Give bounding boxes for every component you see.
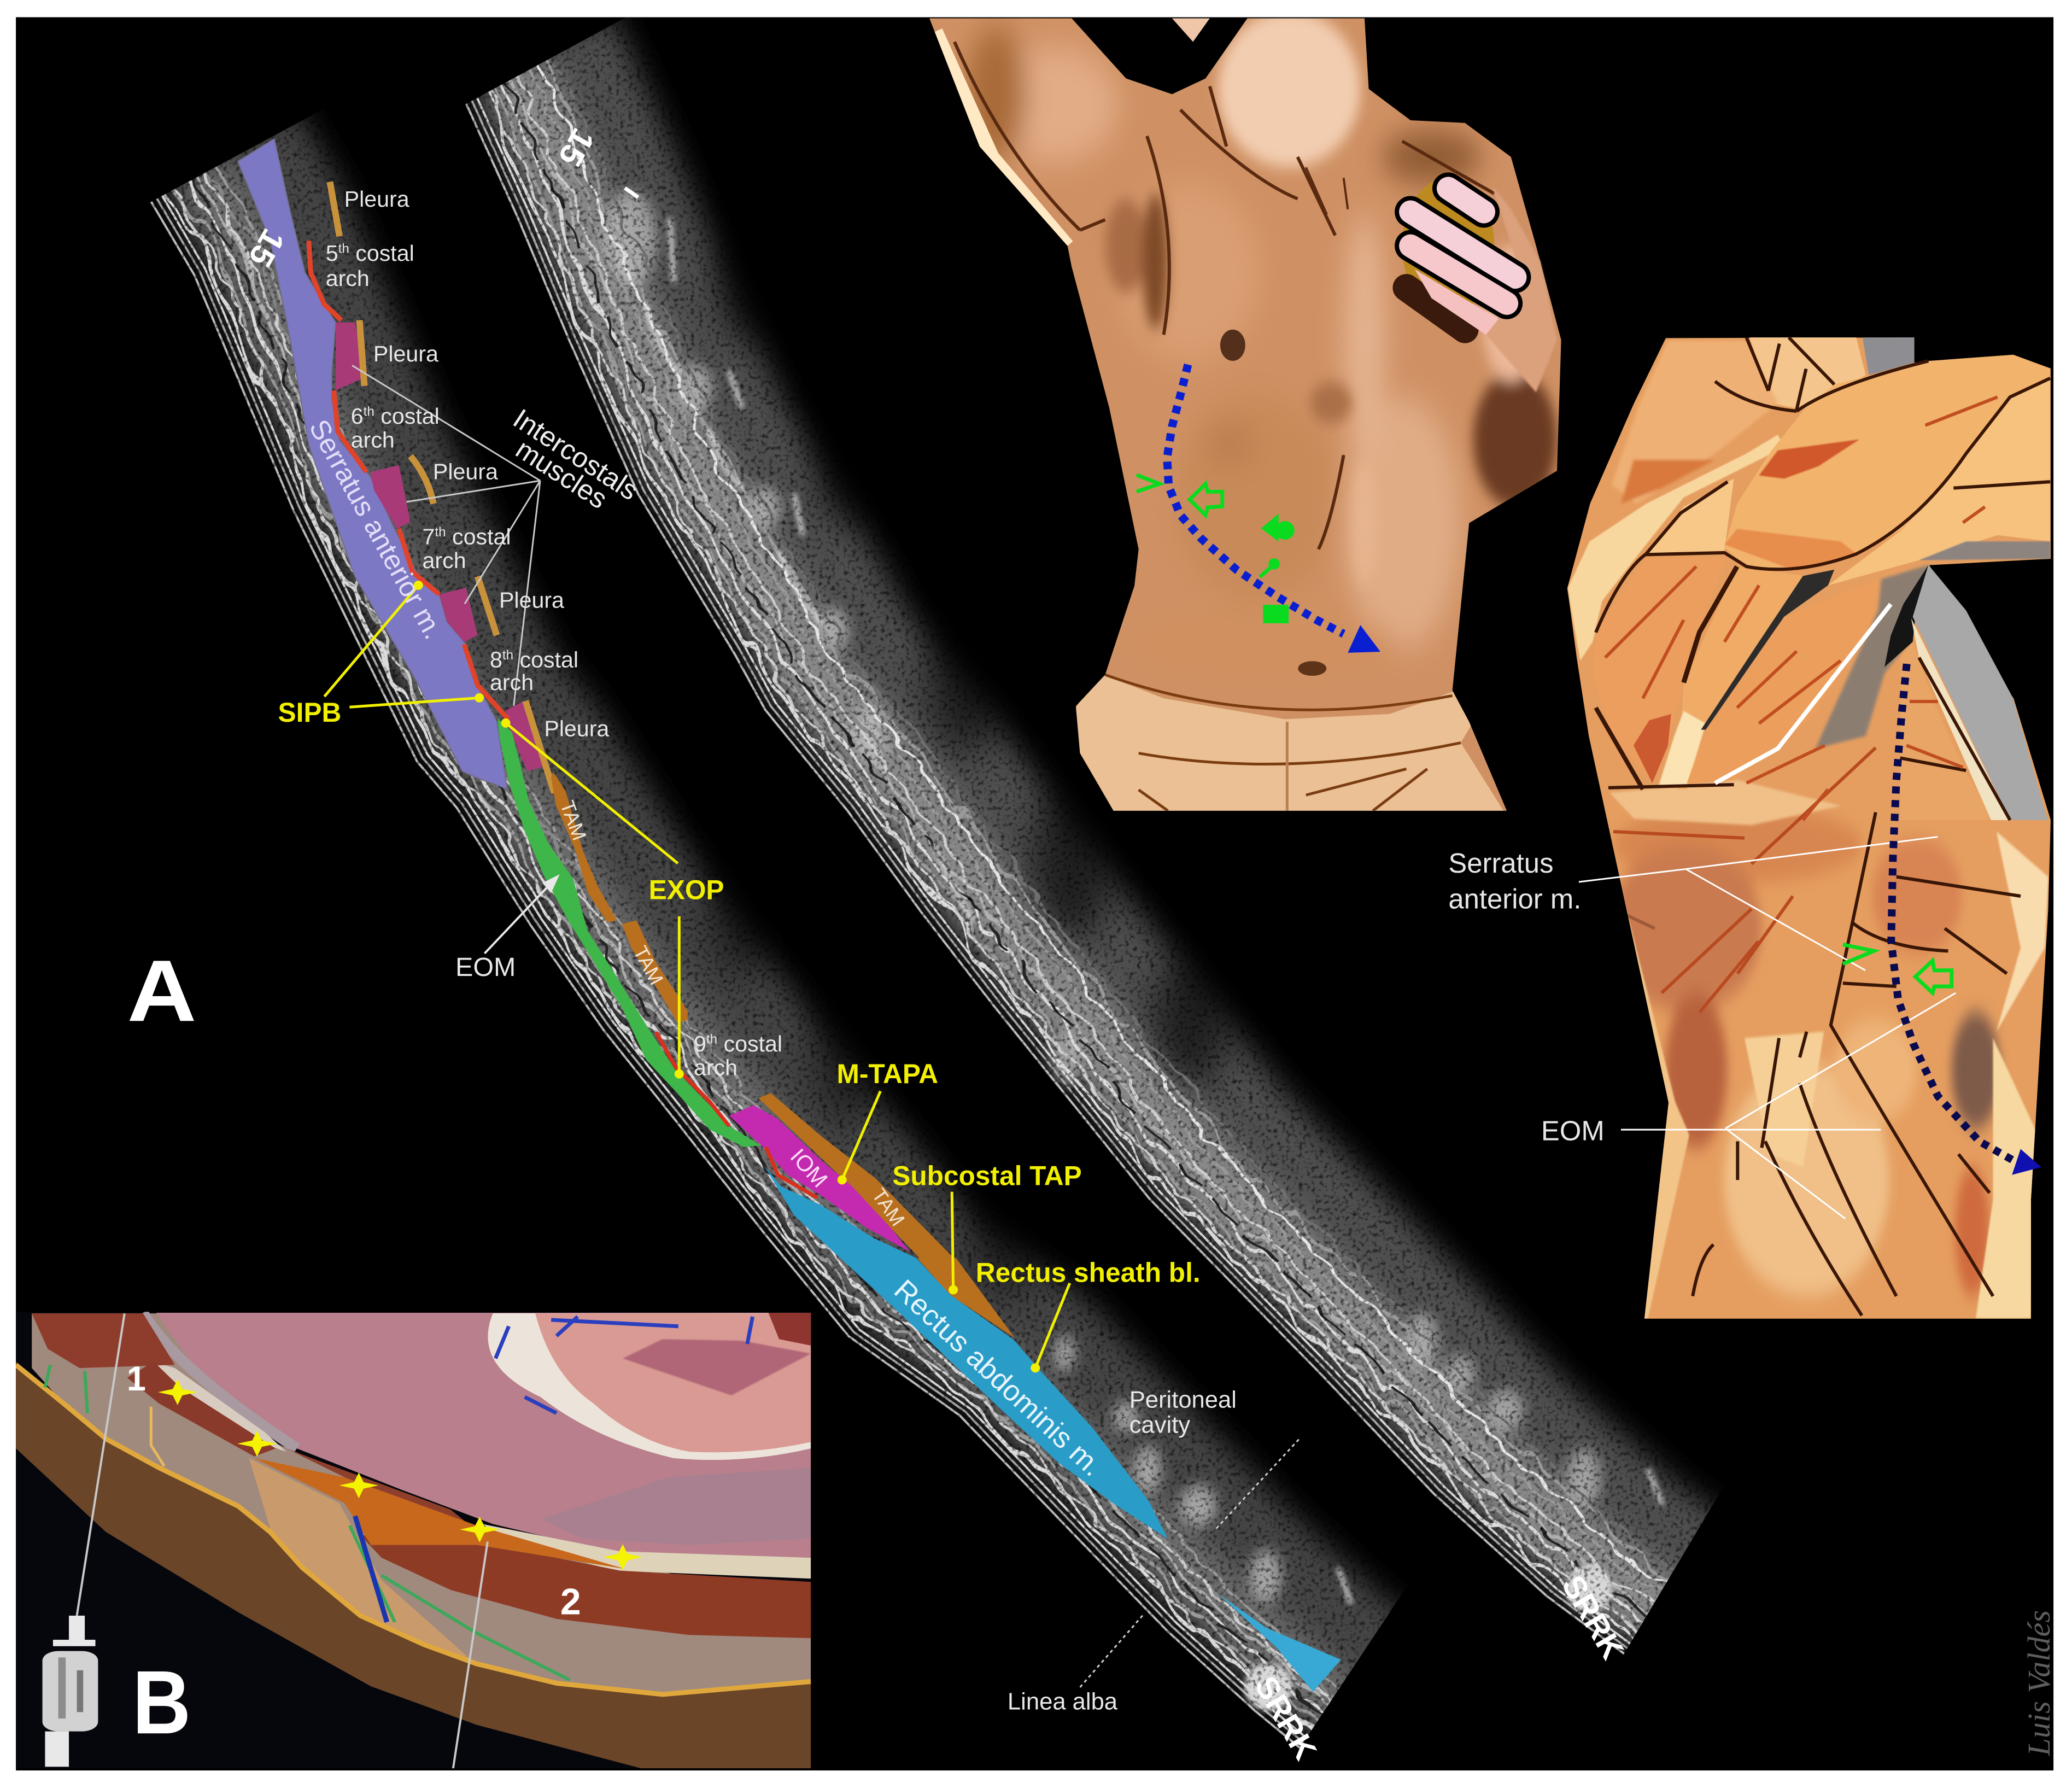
anatomical labels in white: costal <box>717 1031 782 1056</box>
panel B number 2: 2 <box>560 1581 581 1622</box>
intercostal muscle 1 <box>336 323 366 390</box>
ultrasound strip 2 (unlabelled scan) <box>450 0 1774 1669</box>
TAM label 1: TAM <box>556 798 591 843</box>
block names in yellow: EXOP <box>649 874 724 905</box>
anatomical labels in white <box>326 186 1237 1715</box>
subcutaneous tissue band <box>16 1361 811 1768</box>
muscle contours upper <box>1596 337 2050 820</box>
serratus anterior label, right panel: anterior m. <box>1448 883 1581 914</box>
IOM label: IOM <box>786 1144 833 1192</box>
anatomical labels in white: cavity <box>1129 1412 1190 1439</box>
coloured muscle overlays, upper scan <box>238 139 554 793</box>
reddish muscle fibres <box>1613 748 1876 1012</box>
probe logo strip 1: SRRK <box>1248 1670 1324 1766</box>
lens shading <box>1724 529 1856 571</box>
stomach lumen <box>623 1339 811 1395</box>
block names in yellow: SIPB <box>278 697 341 728</box>
anatomical labels in white: costal <box>513 647 578 673</box>
transversus abdominis muscle segment 1 <box>551 772 617 922</box>
anatomical labels in white: arch <box>351 428 395 453</box>
needle two <box>453 1542 488 1768</box>
anatomical labels in white: Linea alba <box>1008 1689 1118 1715</box>
stomach vessels <box>495 1317 753 1413</box>
dark muscle upper section <box>32 1313 175 1368</box>
navel <box>1298 661 1326 676</box>
TAM label 3: TAM <box>868 1184 909 1230</box>
transversus abdominis muscle segment 3 <box>758 1093 954 1258</box>
grey axilla <box>1816 565 1928 749</box>
serratus anterior label, right panel: Serratus <box>1448 847 1554 879</box>
serratus pointer lines <box>1579 837 1938 970</box>
depth marker strip 2: 15 <box>552 122 602 173</box>
green nerves <box>45 1365 570 1680</box>
anatomical labels in white: 7 <box>423 524 435 549</box>
lower muscle contours <box>1693 812 2021 1316</box>
anatomical labels in white: Pleura <box>373 341 438 366</box>
navy dotted scan path on muscle <box>1891 664 2014 1161</box>
anatomical labels in white: th <box>435 525 446 540</box>
left cream band <box>1567 435 1784 660</box>
artist signature: Luis Valdés <box>2021 1610 2057 1756</box>
blue vessel <box>355 1516 387 1622</box>
anatomical labels in white: costal <box>349 241 414 266</box>
external oblique muscle <box>497 718 761 1147</box>
skin shading <box>967 26 1482 675</box>
lower muscle shading <box>1610 806 2000 1296</box>
red pectoral blob <box>1634 714 1671 783</box>
anatomical labels in white: arch <box>490 670 534 695</box>
intercostals muscles rotated label: muscles <box>511 433 613 515</box>
pale strip <box>1911 618 2010 820</box>
tan oblique layer <box>249 1458 472 1661</box>
white tendon line <box>1715 604 1891 783</box>
rectus abdominis muscle <box>764 1165 1168 1539</box>
pale arm edge <box>936 31 1068 246</box>
big arm lens <box>1724 355 2050 571</box>
green probe markers <box>1137 475 1292 622</box>
serratus anterior muscle <box>238 139 507 789</box>
waistband and trousers <box>1074 672 1507 816</box>
coloured muscle overlays, middle scan <box>497 718 954 1258</box>
rib bands <box>1900 642 1998 820</box>
nipple <box>1220 330 1245 361</box>
injection target dots <box>414 581 1040 1372</box>
red fibres upper <box>1605 397 1998 820</box>
yellow fascia line <box>16 1365 811 1694</box>
stomach wall <box>488 1313 811 1460</box>
serratus anterior rotated label: Serratus anterior m. <box>303 414 449 644</box>
EOM arrow <box>484 876 558 954</box>
anatomical labels in white: 5 <box>326 241 338 266</box>
blue arrowhead <box>1348 625 1380 653</box>
pleura lines <box>330 182 554 793</box>
intercostal muscle 2 <box>370 465 411 529</box>
lower costal arch lines <box>656 1032 817 1197</box>
block names in yellow: Rectus sheath bl. <box>976 1257 1201 1288</box>
rectus abdominis far end <box>1218 1594 1341 1692</box>
needle one <box>77 1313 125 1616</box>
anatomical labels in white: th <box>338 242 349 256</box>
rib muscle band lower <box>360 1535 811 1638</box>
pale nerve branch <box>151 1407 165 1466</box>
intercostal pointer lines <box>352 365 540 706</box>
anatomical labels in white: Pleura <box>499 588 564 613</box>
panel label A: A <box>127 942 196 1040</box>
anatomical labels in white: costal <box>374 404 440 429</box>
ultrasound strip 1 (annotated scan) <box>132 79 1456 1774</box>
pale wedge beneath <box>1659 711 1706 786</box>
anatomical labels in white: 9 <box>694 1031 706 1056</box>
depth marker strip 1: 15 <box>242 223 292 273</box>
pale neck muscles <box>1749 337 1866 410</box>
panel B number 1: 1 <box>127 1360 146 1398</box>
anatomical labels in white: 8 <box>490 647 502 673</box>
lens red patch <box>1759 440 1859 478</box>
anatomical labels in white: Pleura <box>433 459 498 484</box>
grey neck backdrop <box>1863 337 1915 375</box>
grey outer skin <box>1913 565 2047 820</box>
anatomical labels in white: EOM <box>455 952 516 982</box>
transversus abdominis muscle segment 2 <box>622 920 688 1024</box>
muscle contour lines <box>955 42 1494 549</box>
block names in yellow: Subcostal TAP <box>892 1161 1082 1191</box>
orange aponeurosis <box>254 1458 625 1569</box>
TAM label 2: TAM <box>629 942 668 989</box>
navy arrowhead <box>2012 1149 2041 1175</box>
pectoral left <box>1593 557 1728 783</box>
dark gap <box>1701 570 1834 730</box>
rectus abdominis rotated label: Rectus abdominis m. <box>888 1273 1109 1483</box>
transversus abdominis end <box>917 1258 1015 1338</box>
blue dotted scan path on torso <box>1137 365 1380 653</box>
EOM label, right panel: EOM <box>1541 1115 1605 1146</box>
grey arm underside <box>1919 541 2050 560</box>
triangular tendon <box>1646 478 1734 554</box>
muscle fan layer <box>32 1313 811 1694</box>
lower overlay pointers and path on muscle <box>1579 664 2041 1219</box>
panel label B: B <box>132 1652 191 1753</box>
hand on chest <box>1402 178 1557 392</box>
internal oblique muscle <box>729 1105 910 1252</box>
yellow pointers <box>324 585 1070 1368</box>
anatomical labels in white: 6 <box>351 404 364 429</box>
target stars <box>158 1379 642 1570</box>
probe logo strip 2: SRRK <box>1555 1570 1631 1665</box>
grey inner arc <box>143 1313 297 1448</box>
intercostals muscles rotated label: Intercostals <box>508 402 644 506</box>
anatomical labels in white: arch <box>694 1055 738 1080</box>
anatomical labels in white: Pleura <box>544 716 609 741</box>
anatomical labels in white: th <box>706 1032 717 1046</box>
anatomical labels in white: arch <box>326 266 370 291</box>
peritoneal pink cavity <box>156 1313 811 1561</box>
anatomical labels in white: Peritoneal <box>1129 1387 1237 1413</box>
needle hub <box>43 1616 98 1767</box>
anatomical labels in white: arch <box>423 548 466 573</box>
intercostal muscle 4 <box>506 701 543 771</box>
lower arm strip <box>1828 378 2050 586</box>
anatomical labels in white: Pleura <box>344 186 409 212</box>
serratus anterior label, right panel <box>1448 847 1581 914</box>
anatomical labels in white: costal <box>446 524 511 549</box>
green probe markers on muscle <box>1843 944 1952 993</box>
costal arch lines <box>309 241 508 719</box>
anatomical labels in white: th <box>502 648 513 663</box>
shoulder shading <box>1612 341 1778 504</box>
dark axillary V <box>1884 565 1928 667</box>
upper muscles shoulder and pectoral <box>1567 337 2050 820</box>
pectoral right <box>1687 579 1878 783</box>
rib muscle band upper <box>127 1361 276 1457</box>
anatomical labels in white: th <box>364 404 374 419</box>
chin <box>1172 18 1210 42</box>
peritoneal lining <box>154 1361 286 1452</box>
stomach red back wall <box>769 1313 811 1346</box>
muscle anatomy illustration <box>1558 329 2072 1340</box>
torso illustration <box>929 10 1585 816</box>
intercostal muscle 3 <box>439 588 478 642</box>
tick marker strip 2 <box>625 188 638 197</box>
block names in yellow <box>278 697 1201 1288</box>
panel B anatomical cross section <box>16 1312 811 1768</box>
block names in yellow: M-TAPA <box>837 1059 938 1089</box>
EOM pointer lines <box>1621 993 1956 1219</box>
pectoral middle <box>1677 566 1806 790</box>
dotted guide lines <box>1079 1440 1299 1688</box>
